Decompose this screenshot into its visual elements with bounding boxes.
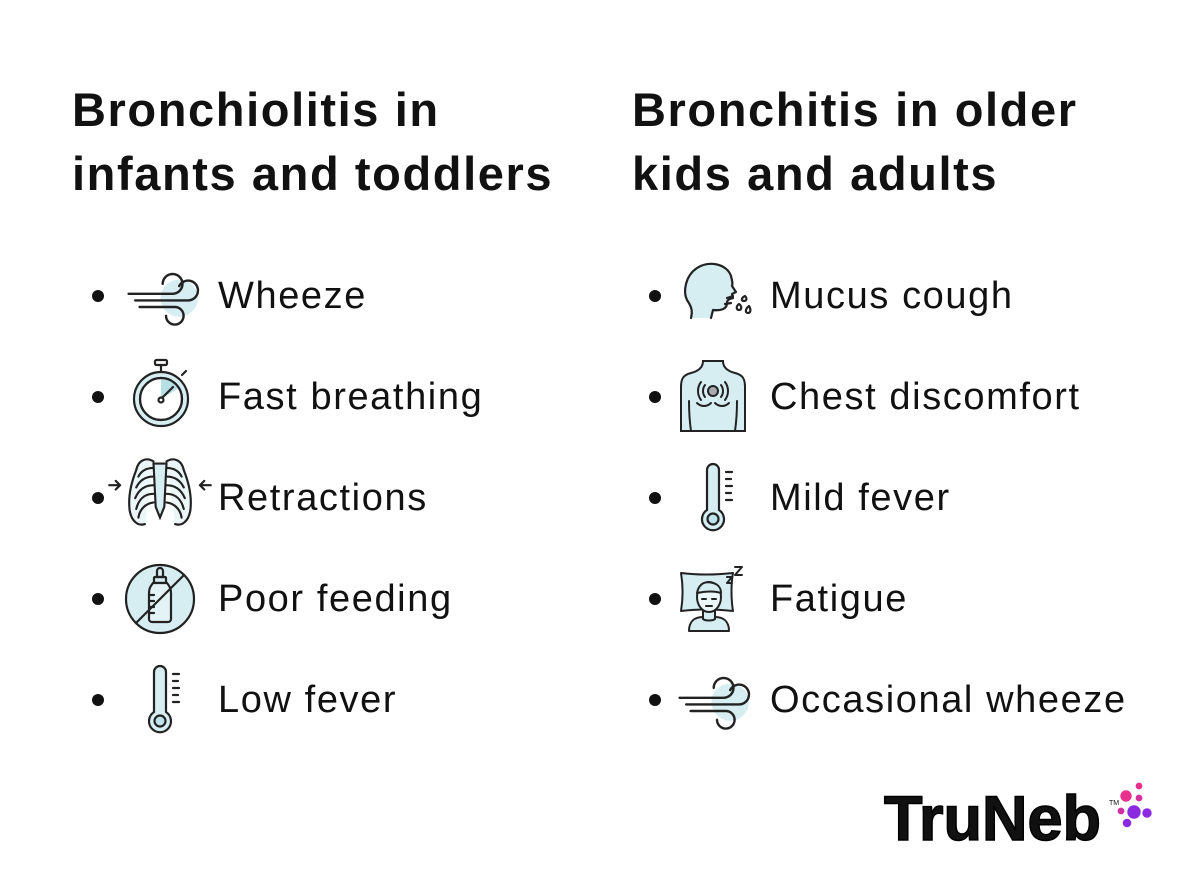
item: Fatigue: Fatigue — [770, 578, 908, 620]
item: Retractions — [92, 458, 428, 526]
item: Wheeze — [92, 272, 367, 326]
title: left column: infants and toddlers — [72, 147, 553, 200]
item: Mucus cough — [649, 262, 1014, 320]
item: Poor feeding — [92, 564, 453, 634]
item: Occasional wheeze: Occasional wheeze — [770, 679, 1127, 721]
title: left column — [72, 83, 553, 200]
icon: stopwatch — [132, 358, 190, 428]
logo: TruNeb: TM — [1109, 800, 1119, 807]
item: Fast breathing: Fast breathing — [218, 376, 483, 418]
icon: thermometer — [148, 664, 180, 734]
item: Chest discomfort: Chest discomfort — [770, 376, 1081, 418]
logo: TruNeb: TruNeb — [884, 784, 1101, 854]
title: left column: Bronchiolitis in — [72, 83, 440, 136]
icon: wind — [127, 272, 200, 326]
title: right column: Bronchitis in older — [632, 83, 1078, 136]
item: Fatigue — [649, 566, 908, 632]
icon: crossed bottle — [124, 564, 196, 634]
item: Occasional wheeze — [649, 676, 1127, 730]
item: Mild fever: Mild fever — [770, 477, 951, 519]
icon: chest — [680, 360, 746, 432]
title: right column — [632, 83, 1078, 200]
item: Wheeze: Wheeze — [218, 275, 367, 317]
icon: thermometer — [700, 462, 734, 532]
icon: sleeping person — [680, 566, 743, 632]
item: Mucus cough: Mucus cough — [770, 275, 1014, 317]
icon: ribcage — [108, 458, 212, 526]
item: Low fever: Low fever — [218, 679, 397, 721]
item: Fast breathing — [92, 358, 483, 428]
logo dots — [1118, 782, 1152, 828]
title: right column: kids and adults — [632, 147, 998, 200]
item: Retractions: Retractions — [218, 477, 428, 519]
icon: wind — [678, 676, 750, 730]
item: Poor feeding: Poor feeding — [218, 578, 453, 620]
icon: coughing head — [684, 262, 752, 320]
item: Chest discomfort — [649, 360, 1081, 432]
item: Mild fever — [649, 462, 951, 532]
item: Low fever — [92, 664, 397, 734]
